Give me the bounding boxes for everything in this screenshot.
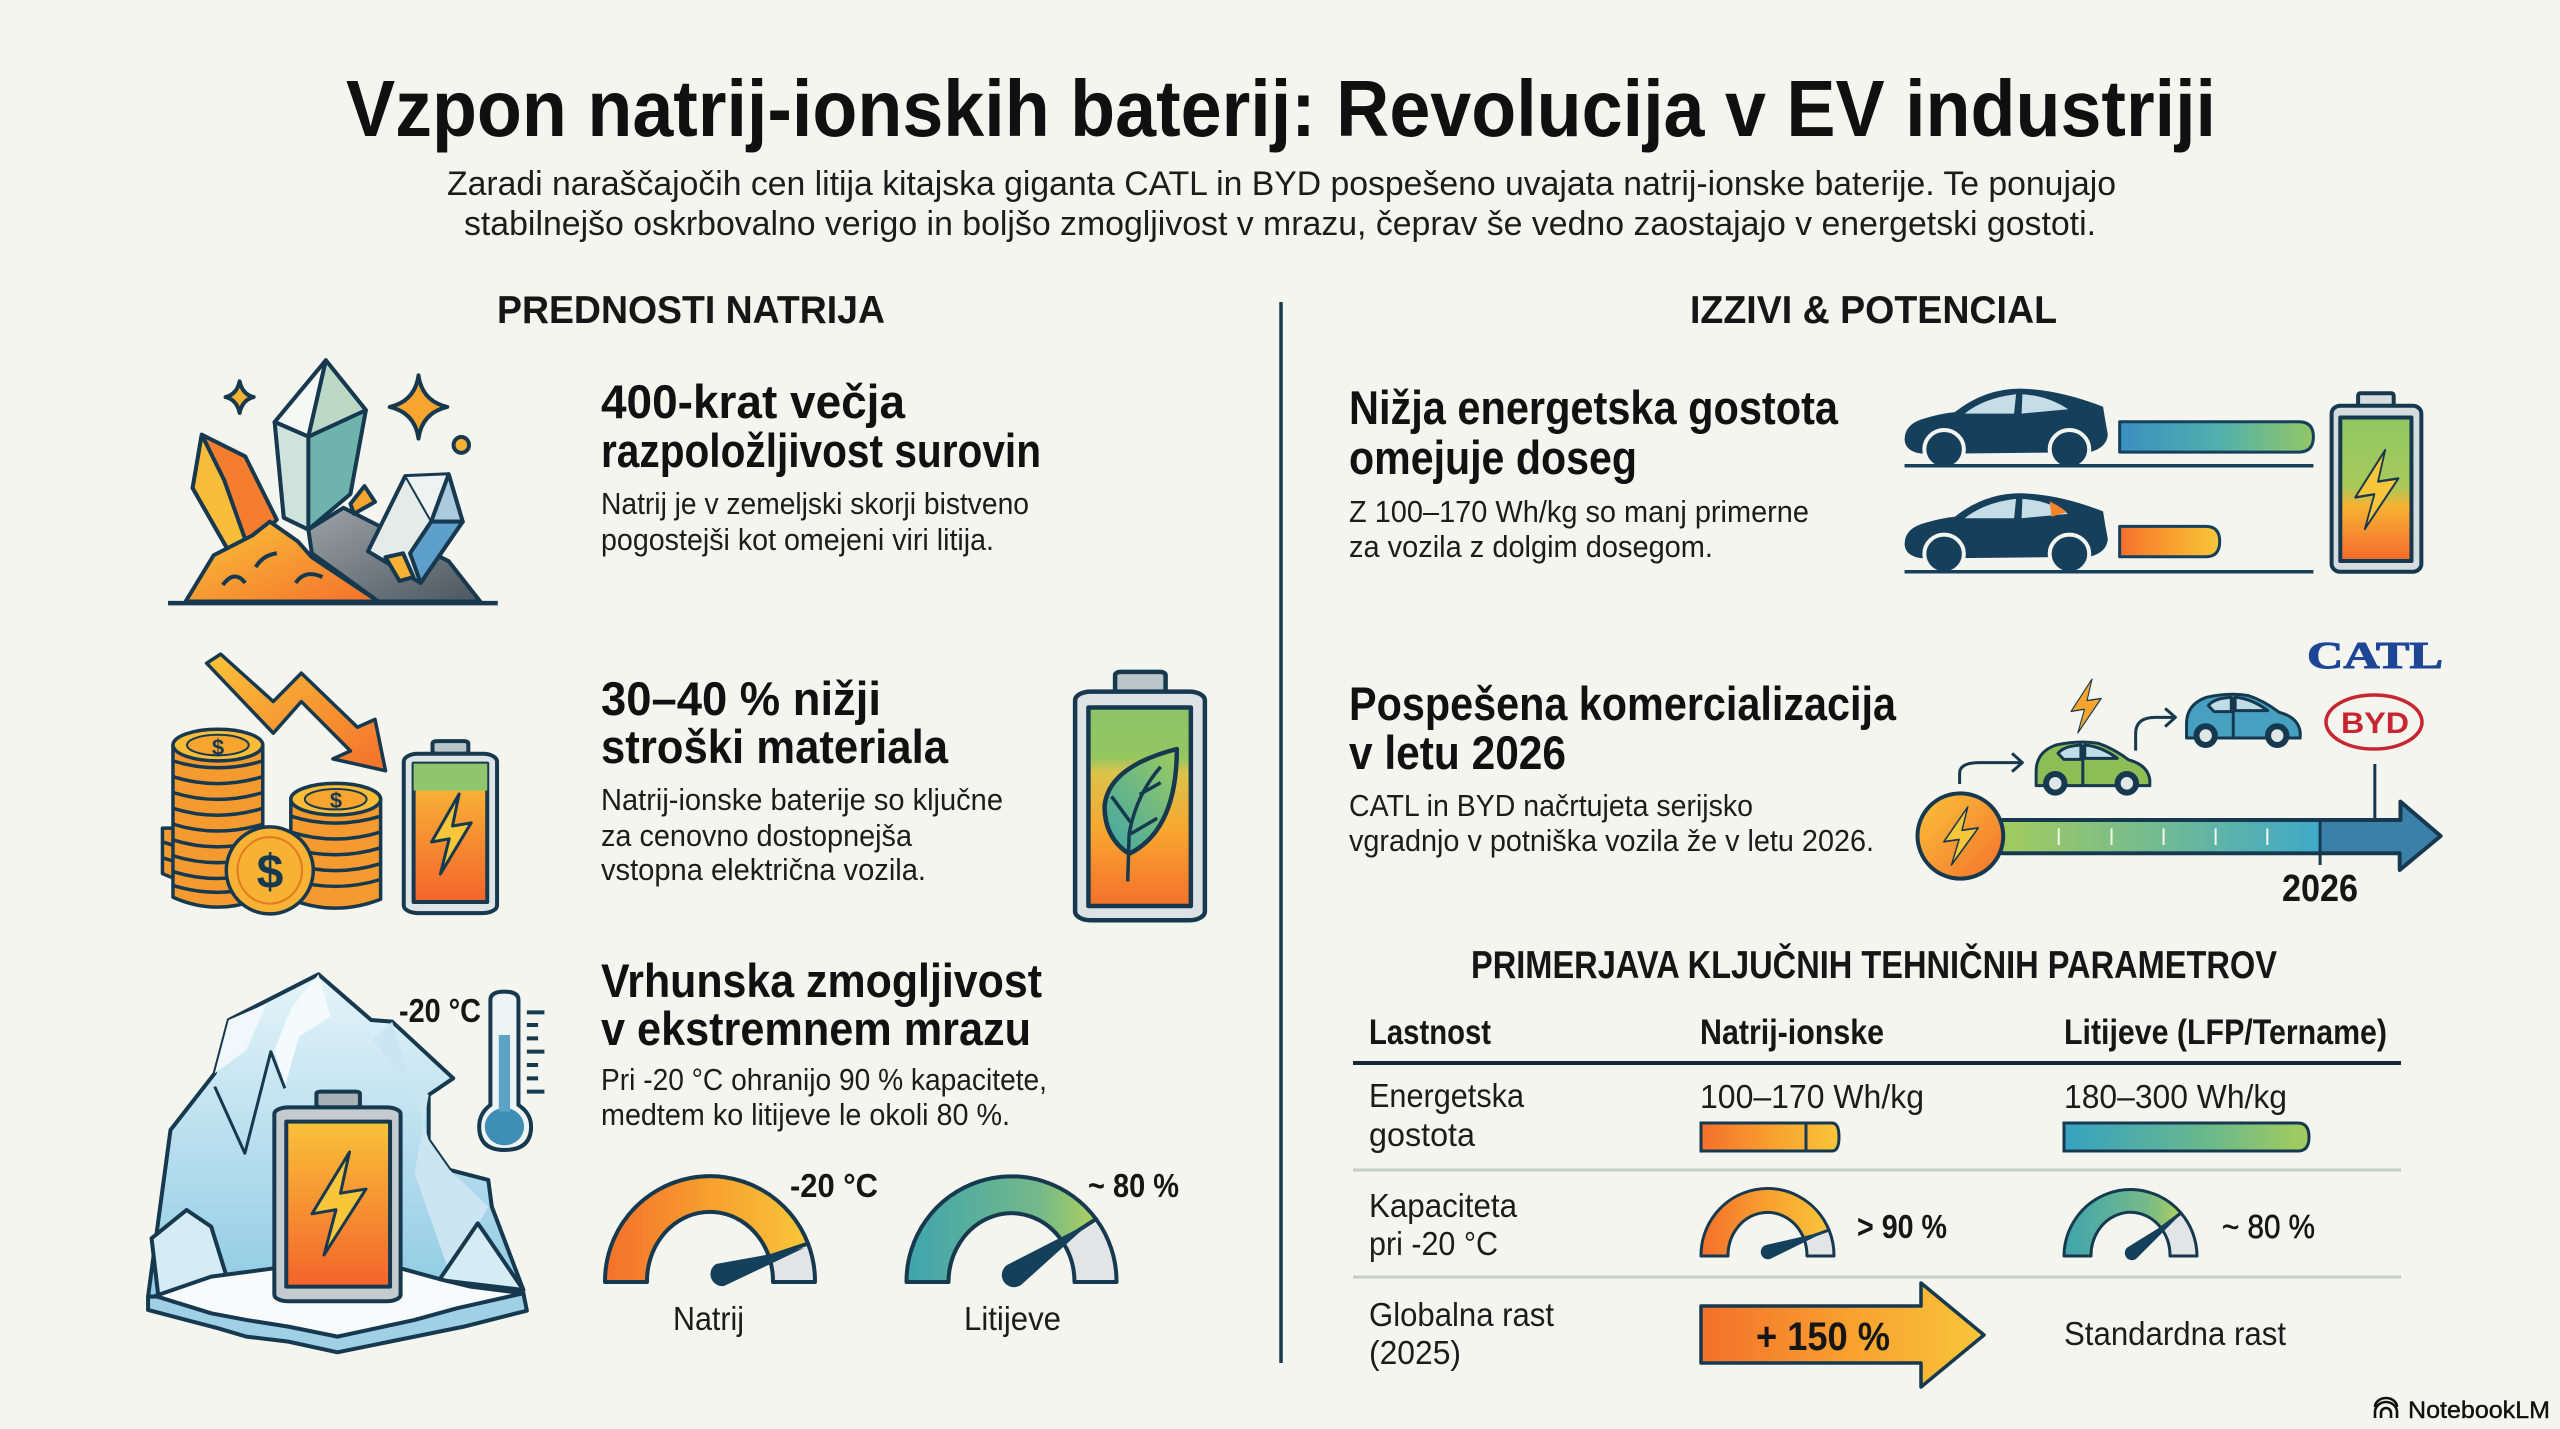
- icon: coins and falling cost arrow: [162, 654, 386, 914]
- text: raw materials: Natrij je v zemeljski skorji bistveno: [601, 486, 1029, 521]
- row: energetska gostota: Energetska: [1369, 1077, 1525, 1114]
- icon: battery with leaf: [1075, 672, 1205, 920]
- row: kapaciteta: [1369, 1187, 2315, 1262]
- row: kapaciteta: ~ 80 %: [2222, 1208, 2315, 1245]
- text: energy density: [1349, 381, 1839, 564]
- row: energetska gostota: 100–170 Wh/kg: [1700, 1078, 1924, 1115]
- icon: cars with range bars: [1905, 389, 2313, 573]
- table header: [1369, 1013, 2387, 1052]
- logo: CATL: CATL: [2307, 635, 2443, 677]
- gauge: natrij: -20 °C: [790, 1167, 878, 1204]
- label: -20 C thermometer: -20 °C: [399, 992, 481, 1029]
- row: globalna rast: + 150 %: [1756, 1315, 1890, 1359]
- timeline: rollout to 2026: [1918, 764, 2441, 910]
- text: raw materials: [601, 375, 1041, 557]
- text: cold performance: Pri -20 °C ohranijo 90 % kapacitete,: [601, 1062, 1047, 1097]
- panel: izzivi in potencial: [1349, 289, 2443, 1387]
- text: material costs: [601, 672, 1003, 887]
- heading: comparison table: PRIMERJAVA KLJUČNIH TEHNIČNIH PARAMETROV: [1471, 942, 2277, 987]
- text: cold performance: Vrhunska zmogljivost: [601, 954, 1042, 1007]
- text: energy density: omejuje doseg: [1349, 431, 1637, 484]
- icon: thermometer: [479, 992, 544, 1150]
- heading: izzivi in potencial: IZZIVI & POTENCIAL: [1690, 289, 2057, 332]
- text: energy density: za vozila z dolgim dosegom.: [1349, 529, 1713, 564]
- text: commercialisation: CATL in BYD načrtujeta serijsko: [1349, 788, 1753, 823]
- subtitle: stabilnejšo oskrbovalno verigo in boljšo zmogljivost v mrazu, čeprav še vedno zaostajajo v energetski gostoti.: [464, 205, 2096, 243]
- timeline: rollout to 2026: 2026: [2282, 868, 2358, 910]
- text: cold performance: v ekstremnem mrazu: [601, 1002, 1031, 1055]
- logo: BYD: [2326, 695, 2422, 749]
- text: cold performance: medtem ko litijeve le okoli 80 %.: [601, 1097, 1010, 1132]
- table header: Lastnost: [1369, 1013, 1491, 1052]
- gauge: natrij: [605, 1167, 878, 1337]
- title: Vzpon natrij-ionskih baterij: Revolucija v EV industriji: [346, 64, 2216, 153]
- heading: prednosti natrija: PREDNOSTI NATRIJA: [497, 289, 885, 332]
- row: kapaciteta: > 90 %: [1857, 1208, 1947, 1245]
- gauge: litijeve: [906, 1167, 1179, 1337]
- text: commercialisation: Pospešena komercializacija: [1349, 677, 1897, 730]
- icon: blue car: [2187, 694, 2300, 745]
- watermark: NotebookLM: NotebookLM: [2408, 1397, 2550, 1424]
- icon: green-orange battery: [2332, 393, 2421, 572]
- row: globalna rast: (2025): [1369, 1334, 1461, 1371]
- text: material costs: vstopna električna vozila.: [601, 852, 926, 887]
- subtitle: Zaradi naraščajočih cen litija kitajska giganta CATL in BYD pospešeno uvajata natrij-ionske baterije. Te ponujajo: [447, 165, 2116, 203]
- row: globalna rast: [1369, 1283, 2286, 1387]
- icon: green car: [1960, 708, 2175, 793]
- row: energetska gostota: gostota: [1369, 1116, 1476, 1153]
- text: raw materials: razpoložljivost surovin: [601, 424, 1041, 477]
- subtitle: [447, 165, 2116, 243]
- icon: coins and falling cost arrow: $: [257, 846, 284, 899]
- text: material costs: 30–40 % nižji: [601, 672, 881, 725]
- row: energetska gostota: 180–300 Wh/kg: [2064, 1078, 2287, 1115]
- gauge: natrij: Natrij: [673, 1300, 744, 1337]
- row: energetska gostota: [1369, 1077, 2309, 1153]
- text: raw materials: 400-krat večja: [601, 375, 906, 428]
- text: material costs: Natrij-ionske baterije so ključne: [601, 782, 1003, 817]
- gauge: litijeve: Litijeve: [964, 1300, 1061, 1337]
- text: energy density: Z 100–170 Wh/kg so manj primerne: [1349, 494, 1809, 529]
- text: commercialisation: v letu 2026: [1349, 726, 1566, 779]
- icon: crystals: [168, 360, 498, 603]
- text: energy density: Nižja energetska gostota: [1349, 381, 1839, 434]
- text: cold performance: [601, 954, 1047, 1132]
- text: raw materials: pogostejši kot omejeni viri litija.: [601, 522, 994, 557]
- table header: Natrij-ionske: [1700, 1013, 1884, 1052]
- logo: BYD: BYD: [2341, 707, 2409, 740]
- row: globalna rast: Standardna rast: [2064, 1315, 2286, 1352]
- row: globalna rast: Globalna rast: [1369, 1296, 1554, 1333]
- text: material costs: za cenovno dostopnejša: [601, 818, 913, 853]
- text: commercialisation: vgradnjo v potniška vozila že v letu 2026.: [1349, 823, 1874, 858]
- comparison table: [1353, 1013, 2401, 1387]
- gauge: litijeve: ~ 80 %: [1088, 1167, 1179, 1204]
- panel: prednosti natrija: [148, 289, 1205, 1352]
- icon: coins and falling cost arrow: $: [330, 788, 342, 813]
- icon: charging bolt: [2071, 679, 2101, 733]
- row: kapaciteta: pri -20 °C: [1369, 1225, 1498, 1262]
- icon: coins and falling cost arrow: $: [212, 735, 224, 760]
- icon: battery in iceberg: [148, 974, 527, 1352]
- row: kapaciteta: Kapaciteta: [1369, 1187, 1518, 1224]
- text: material costs: stroški materiala: [601, 720, 949, 773]
- text: commercialisation: [1349, 677, 1897, 858]
- icon: small battery: [404, 741, 497, 913]
- table header: Litijeve (LFP/Tername): [2064, 1013, 2387, 1052]
